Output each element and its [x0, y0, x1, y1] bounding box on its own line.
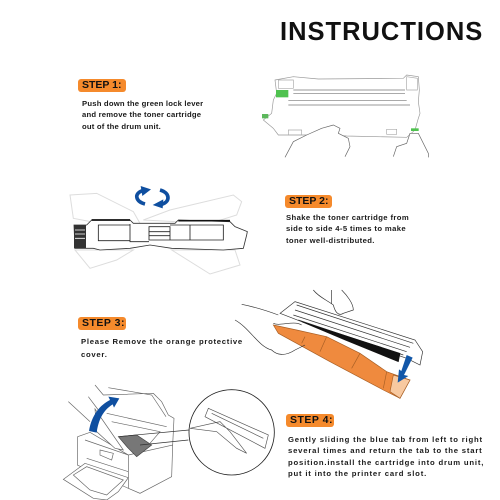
step 3 text: [81, 337, 243, 359]
step 2 text: side to side 4-5 times to make: [286, 224, 406, 233]
step 2 label: STEP 2:: [289, 195, 328, 207]
step 2 text: Shake the toner cartridge from: [286, 213, 409, 222]
step 3 text: Please Remove the orange protective: [81, 337, 243, 346]
step 4 label: STEP 4:: [290, 414, 333, 426]
step 3 label: STEP 3:: [82, 317, 125, 329]
step 4 text: position.install the cartridge into drum unit,: [288, 458, 484, 467]
step 2 text: toner well-distributed.: [286, 236, 375, 245]
step 4 text: put it into the printer card slot.: [288, 469, 427, 478]
step 4 text: several times and return the tab to the start: [288, 446, 483, 455]
step 1 label: STEP 1:: [82, 79, 122, 91]
step 1 text: Push down the green lock lever: [82, 99, 203, 108]
step 3 text: cover.: [81, 350, 108, 359]
title: INSTRUCTIONS: [280, 18, 483, 46]
step 4 text: Gently sliding the blue tab from left to right: [288, 435, 483, 444]
step 1 text: out of the drum unit.: [82, 122, 161, 131]
step 1 text: [82, 99, 203, 131]
step 1 text: and remove the toner cartridge: [82, 110, 201, 119]
step 4 text: [288, 435, 484, 478]
step 2 text: [286, 213, 409, 245]
